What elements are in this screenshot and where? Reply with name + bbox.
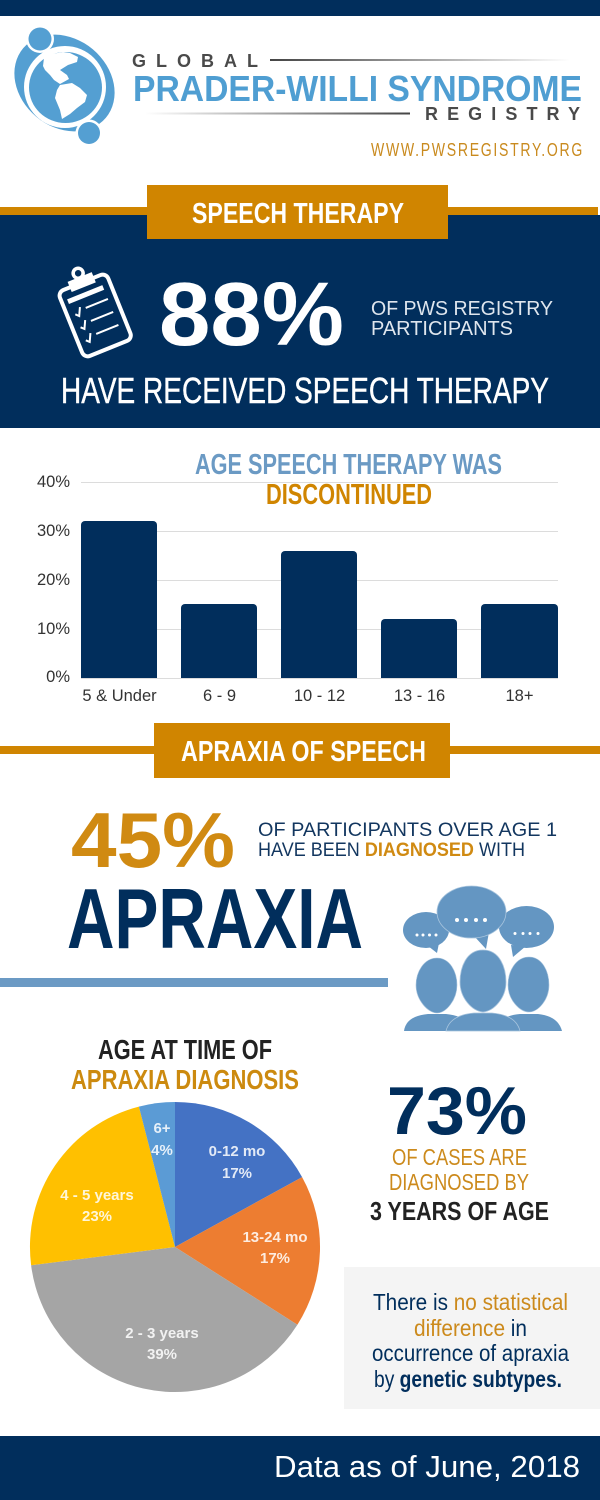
pie labels: 17%	[222, 1165, 252, 1182]
icon: people talking	[403, 886, 562, 1031]
bars	[81, 521, 558, 678]
x axis labels: 10 - 12	[294, 687, 345, 705]
logo wordmark: GLOBAL	[132, 51, 258, 71]
text: cases diagnosed by 3: OF CASES ARE	[392, 1144, 527, 1170]
heading: apraxia of speech: APRAXIA OF SPEECH	[181, 736, 426, 768]
pie labels	[60, 1120, 308, 1363]
chart title: AGE SPEECH THERAPY WAS	[195, 449, 502, 481]
heading: apraxia: APRAXIA	[67, 872, 363, 967]
callout: no statistical difference: occurrence of apraxia	[372, 1340, 569, 1366]
y axis labels: 20%	[37, 571, 70, 589]
pie labels: 4%	[151, 1142, 173, 1159]
pie chart: age at diagnosis	[30, 1102, 320, 1392]
callout: no statistical difference: There is no statistical	[373, 1289, 568, 1315]
y axis labels: 30%	[37, 522, 70, 540]
text: cases diagnosed by 3: DIAGNOSED BY	[389, 1169, 529, 1195]
pie labels: 2 - 3 years	[125, 1325, 199, 1342]
footer	[0, 1436, 600, 1500]
pie labels: 39%	[147, 1346, 177, 1363]
logo header	[0, 15, 582, 161]
footer: Data as of June, 2018	[274, 1449, 580, 1484]
logo wordmark: PRADER-WILLI SYNDROME	[133, 68, 582, 109]
stat: 45%: 45%	[71, 796, 235, 884]
text: participants diagnosed: OF PARTICIPANTS OVER AGE 1	[258, 820, 557, 841]
heading: speech therapy: SPEECH THERAPY	[192, 198, 404, 230]
heading: apraxia of speech	[0, 723, 600, 778]
text: of PWS registry participants: PARTICIPANTS	[371, 318, 513, 340]
x axis labels: 18+	[506, 687, 534, 705]
pie labels: 17%	[260, 1250, 290, 1267]
divider bar	[0, 978, 388, 987]
y axis labels: 0%	[46, 668, 70, 686]
callout: no statistical difference	[344, 1267, 600, 1409]
callout: no statistical difference: by genetic subtypes.	[374, 1366, 562, 1392]
pie chart title: APRAXIA DIAGNOSIS	[71, 1064, 299, 1095]
icon: clipboard	[52, 259, 133, 358]
y axis labels: 10%	[37, 620, 70, 638]
chart title	[195, 449, 502, 511]
x axis labels: 13 - 16	[394, 687, 445, 705]
pie chart title: AGE AT TIME OF	[98, 1034, 272, 1065]
logo wordmark: REGISTRY	[425, 104, 580, 124]
logo wordmark	[132, 51, 582, 124]
pie chart title	[71, 1034, 299, 1095]
callout: no statistical difference: difference in	[414, 1315, 527, 1341]
text: of PWS registry participants	[371, 298, 553, 340]
stat: 88%: 88%	[159, 265, 344, 365]
x axis labels	[82, 687, 534, 705]
x axis labels: 6 - 9	[203, 687, 236, 705]
x axis labels: 5 & Under	[82, 687, 157, 705]
text: of PWS registry participants: OF PWS REGISTRY	[371, 298, 553, 320]
pie labels: 4 - 5 years	[60, 1187, 134, 1204]
y axis labels	[37, 473, 70, 686]
text: participants diagnosed	[258, 820, 557, 861]
bar chart: age discontinued	[37, 473, 558, 705]
text: participants diagnosed: HAVE BEEN DIAGNOSED WITH	[258, 840, 525, 861]
icon: globe logo	[0, 15, 134, 151]
chart title: DISCONTINUED	[266, 479, 432, 511]
pie labels: 6+	[153, 1120, 171, 1137]
panel: speech therapy	[0, 185, 600, 428]
pie labels: 23%	[82, 1208, 112, 1225]
y axis labels: 40%	[37, 473, 70, 491]
heading: speech therapy	[147, 185, 448, 239]
stat: 73%: 73%	[387, 1073, 527, 1149]
pie labels: 13-24 mo	[242, 1229, 308, 1246]
text: cases diagnosed by 3	[370, 1144, 549, 1226]
pie labels: 0-12 mo	[209, 1143, 265, 1160]
text: cases diagnosed by 3: 3 YEARS OF AGE	[370, 1196, 549, 1226]
top bar	[0, 0, 600, 16]
website url: WWW.PWSREGISTRY.ORG	[371, 140, 582, 161]
